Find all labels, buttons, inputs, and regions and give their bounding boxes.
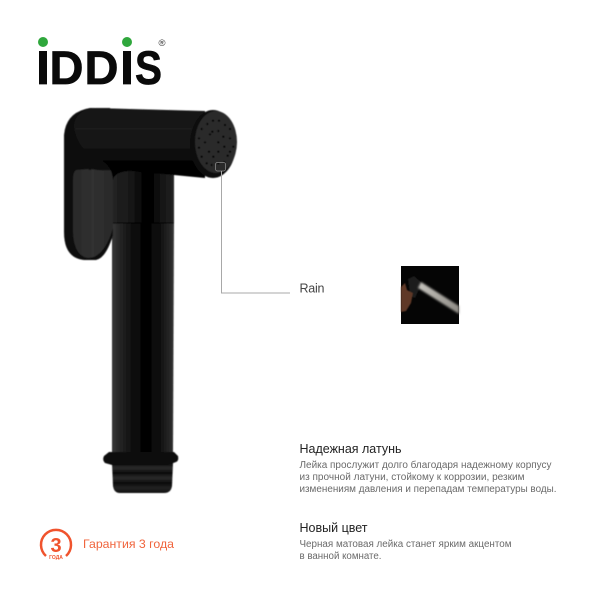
logo: IDDIS	[36, 37, 166, 95]
logo wordmark: D	[50, 42, 84, 95]
sprayer rim	[190, 110, 236, 178]
flange	[103, 452, 178, 465]
heading: new color: Новый цвет	[300, 520, 368, 535]
sprayer face	[195, 111, 237, 173]
logo wordmark	[36, 42, 162, 95]
stem joint line	[113, 222, 174, 224]
warranty	[41, 530, 174, 561]
logo green dot right	[122, 37, 132, 47]
logo wordmark: S	[135, 42, 162, 95]
callout label: Rain	[300, 282, 325, 296]
warranty text: Гарантия 3 года	[83, 537, 174, 551]
body: brass: Лейка прослужит долго благодаря надежному корпусу	[300, 459, 552, 471]
thumbnail: rain spray	[401, 266, 459, 324]
body: new color: Черная матовая лейка станет ярким акцентом	[300, 539, 512, 550]
text block: new color	[300, 520, 512, 562]
body: new color: в ванной комнате.	[300, 551, 382, 562]
thread	[112, 463, 173, 493]
logo wordmark: I	[120, 42, 134, 95]
callout: Rain	[216, 162, 325, 296]
logo green dot left	[38, 37, 48, 47]
callout marker	[216, 162, 226, 171]
body: brass: из прочной латуни, стойкому к коррозии, резким	[300, 472, 525, 483]
upper stem and neck	[108, 160, 174, 223]
back plate	[64, 108, 113, 260]
body: new color	[300, 539, 512, 562]
product: black hand shower	[64, 108, 237, 493]
lever	[73, 169, 113, 258]
callout leader line	[222, 171, 290, 293]
body: brass	[300, 459, 556, 495]
warranty badge: ГОДА	[49, 555, 63, 561]
body: brass: изменениям давления и перепадам температуры воды.	[300, 484, 556, 495]
text block: brass	[300, 441, 556, 495]
registered mark: ®	[158, 38, 166, 49]
logo wordmark: D	[84, 42, 118, 95]
lower stem	[112, 223, 174, 453]
heading: brass: Надежная латунь	[300, 441, 402, 456]
logo wordmark: I	[36, 42, 50, 95]
warranty badge: 3	[50, 535, 62, 557]
warranty badge	[41, 530, 71, 561]
head barrel	[74, 108, 205, 180]
